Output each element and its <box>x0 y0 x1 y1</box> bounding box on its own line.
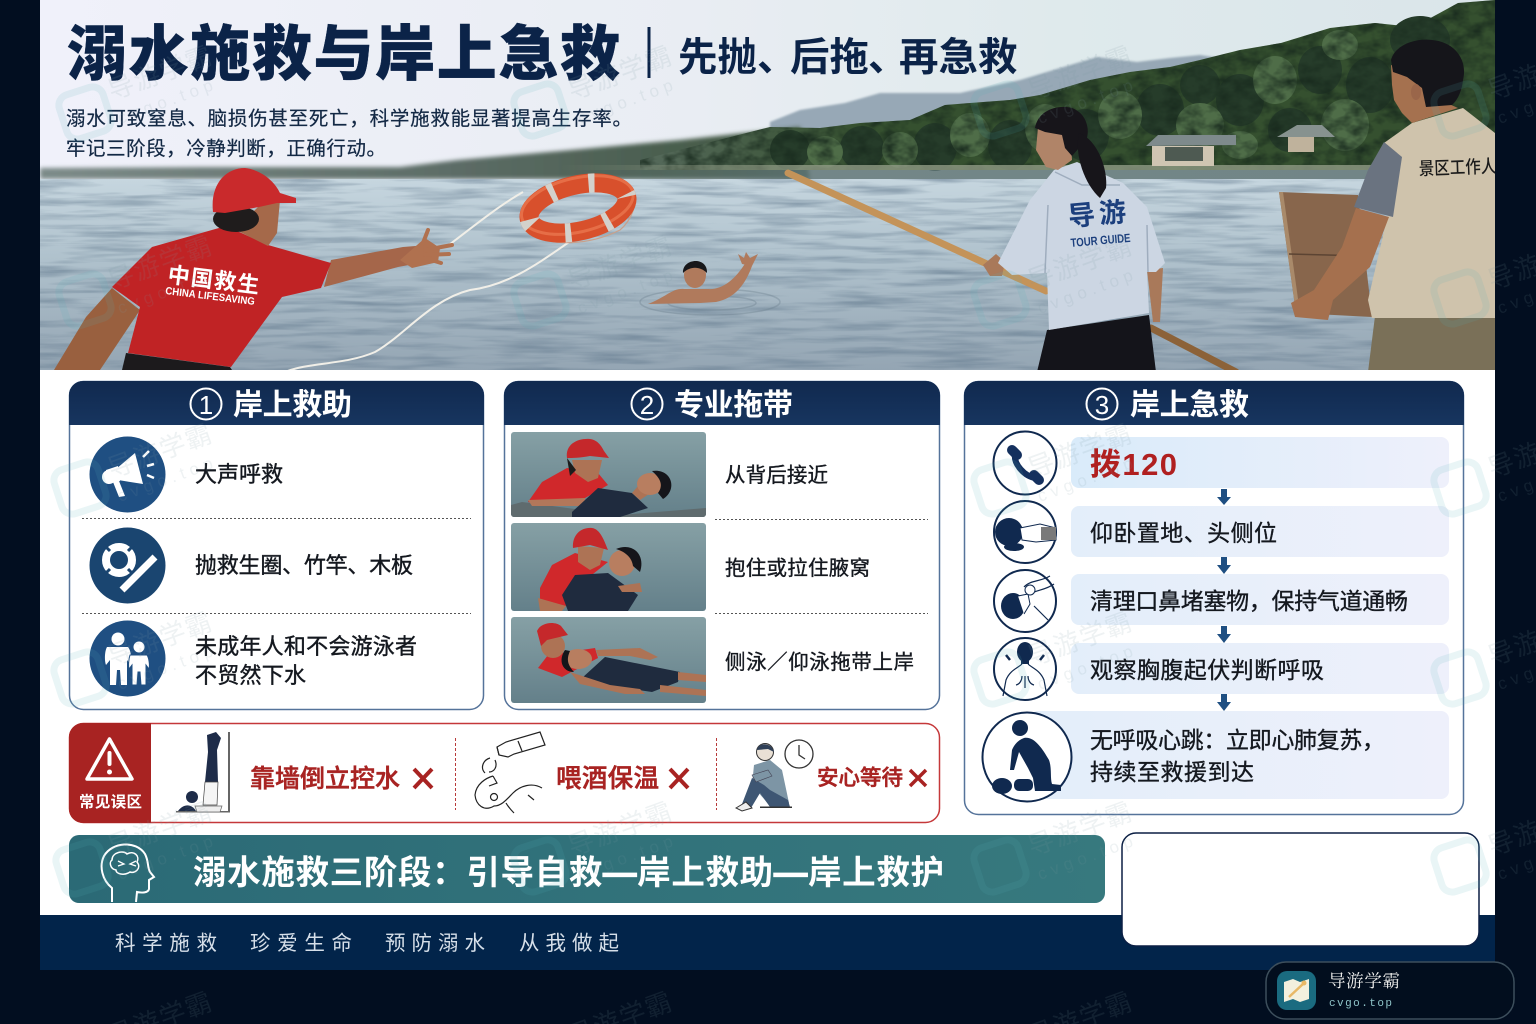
arrow <box>1217 489 1231 505</box>
lakeside pavilions <box>1146 125 1335 166</box>
watermarks: cvgo.top <box>575 832 675 884</box>
step 4 check breathing: 观察胸腹起伏判断呼吸 <box>1090 657 1324 683</box>
header title: 1 <box>199 390 213 420</box>
icon: pouring liquor <box>475 732 545 813</box>
header title: 专业拖带 <box>674 389 793 422</box>
brand url: cvgo.top <box>1329 998 1392 1010</box>
banner text: 溺水施救三阶段：引导自救—岸上救助—岸上救护 <box>193 845 944 894</box>
guide jacket print: TOUR GUIDE <box>1070 231 1131 250</box>
header title: 岸上急救 <box>1130 389 1249 422</box>
panel card <box>504 382 940 710</box>
panel header <box>504 381 940 425</box>
watermarks: cvgo.top <box>115 642 215 694</box>
step 2 lay on back <box>1071 506 1449 557</box>
watermarks: 导游学霸 <box>104 231 216 296</box>
panel: first aid on shore <box>964 381 1464 814</box>
row text: tow: 侧泳／仰泳拖带上岸 <box>725 651 914 674</box>
icon: lifebuoy and pole <box>90 528 166 604</box>
header title: 3 <box>1095 390 1109 420</box>
watermarks: cvgo.top <box>1035 266 1135 318</box>
tag text: 常见误区 <box>79 793 142 811</box>
subtitle: 、 <box>757 36 796 80</box>
icon: head tilted <box>994 501 1056 563</box>
wooded hills <box>640 0 1495 171</box>
watermarks: 导游学霸 <box>1024 607 1136 672</box>
watermarks: cvgo.top <box>1035 76 1135 128</box>
scenic staff man <box>1291 40 1512 372</box>
step 1 dial 120: 拨120 <box>1090 447 1177 482</box>
rope <box>285 192 635 372</box>
watermarks: 导游学霸 <box>564 41 676 106</box>
subtitle: 再急救 <box>899 36 1018 80</box>
watermarks: 导游学霸 <box>564 797 676 862</box>
step 2 lay on back: 仰卧置地、头侧位 <box>1090 520 1277 546</box>
arrow <box>1217 694 1231 711</box>
lifeguard shirt print: 中国救生 <box>166 262 261 298</box>
sky <box>40 0 1495 185</box>
panel card <box>70 382 484 710</box>
step 4 check breathing <box>1071 643 1449 694</box>
hero photo: lake rescue scene <box>40 0 1512 372</box>
watermarks: 导游学霸 <box>104 419 216 484</box>
watermarks: cvgo.top <box>115 76 215 128</box>
icon: phone <box>994 432 1056 494</box>
mistake text: handstand: 靠墙倒立控水 <box>250 765 400 793</box>
step 5 CPR: 无呼吸心跳：立即心肺复苏， <box>1090 721 1385 755</box>
header title: 2 <box>640 390 654 420</box>
footer slogans: 科学施救 <box>115 932 217 955</box>
footer slogans: 珍爱生命 <box>250 932 352 955</box>
watermarks: cvgo.top <box>1035 832 1135 884</box>
lifebuoy ring <box>520 173 636 243</box>
icon: warning triangle <box>87 739 132 779</box>
row text: shout: 大声呼救 <box>195 462 283 487</box>
icon: CPR <box>982 712 1072 802</box>
row text: no minors <box>195 634 417 688</box>
lake water <box>40 179 1495 370</box>
footer slogans: 从我做起 <box>519 932 619 955</box>
ripples around swimmer <box>640 289 780 315</box>
watermarks: cvgo.top <box>115 832 215 884</box>
lifeguard shirt print: CHINA LIFESAVING <box>165 285 255 308</box>
icon: sitting and waiting <box>736 740 813 811</box>
blank white box <box>1122 833 1479 946</box>
subtitle: 先抛 <box>678 36 757 80</box>
panel header <box>69 381 484 425</box>
arrow <box>1217 557 1231 574</box>
wooden board <box>1279 192 1372 317</box>
watermarks: 导游学霸 <box>1024 41 1136 106</box>
guide jacket print <box>1070 198 1130 247</box>
banner background <box>69 835 1105 903</box>
lifeguard in red <box>54 168 452 370</box>
row text: no minors: 未成年人和不会游泳者 <box>195 634 417 659</box>
mistakes tag <box>69 723 151 823</box>
step 5 CPR <box>1030 711 1449 799</box>
mistake text: liquor: 喂酒保温 <box>556 765 659 793</box>
header title: 岸上救助 <box>233 389 352 422</box>
banner: three stages <box>69 835 1105 903</box>
icon: megaphone <box>90 436 166 512</box>
step 5 CPR: 持续至救援到达 <box>1090 759 1254 785</box>
icon: chest rise <box>994 638 1056 700</box>
watermarks: 导游学霸 <box>1024 797 1136 862</box>
photo: hold armpit <box>511 523 706 611</box>
icon: map logo <box>1277 971 1316 1010</box>
watermarks: 导游学霸 <box>104 797 216 862</box>
watermarks: 导游学霸 <box>104 41 216 106</box>
step 1 dial 120 <box>1071 437 1449 488</box>
guide jacket print: 导游 <box>1067 197 1127 232</box>
icon: adult and child <box>90 620 166 696</box>
panel card <box>964 382 1464 814</box>
left distant shoreline <box>40 127 810 179</box>
photo: side stroke tow <box>511 617 706 703</box>
footer band <box>40 915 1495 970</box>
tour guide woman <box>983 107 1165 372</box>
panel: professional towing <box>504 381 940 710</box>
brand badge <box>1266 962 1514 1019</box>
title: 溺水施救与岸上急救 <box>67 21 620 88</box>
step 3 clear airway <box>1071 574 1449 625</box>
icon: head with brain <box>102 844 154 902</box>
intro text <box>66 108 632 160</box>
swimmer waving in water <box>648 252 758 304</box>
icon: handstand against wall <box>176 732 230 812</box>
staff vest print: 景区工作人员 <box>1418 156 1512 179</box>
watermarks: cvgo.top <box>575 266 675 318</box>
bamboo pole <box>788 173 1236 372</box>
footer slogans: 预防溺水 <box>385 932 485 955</box>
watermarks: cvgo.top <box>115 266 215 318</box>
step 3 clear airway: 清理口鼻堵塞物，保持气道通畅 <box>1090 588 1408 614</box>
mistake text: waiting: 安心等待 <box>817 766 903 790</box>
mistakes card <box>70 724 940 822</box>
watermarks: 导游学霸 <box>104 607 216 672</box>
watermarks: 导游学霸 <box>1024 419 1136 484</box>
panel: shore rescue <box>69 381 484 710</box>
arrow <box>1217 626 1231 643</box>
row text: approach: 从背后接近 <box>725 464 828 487</box>
intro text: 溺水可致窒息、脑损伤甚至死亡，科学施救能显著提高生存率。 <box>66 108 632 130</box>
watermarks: 导游学霸 <box>1024 231 1136 296</box>
row text: no minors: 不贸然下水 <box>195 663 306 688</box>
footer slogans <box>115 932 619 955</box>
brand name: 导游学霸 <box>1328 971 1400 991</box>
row text: throw: 抛救生圈、竹竿、木板 <box>195 553 413 578</box>
panel header <box>964 381 1464 425</box>
subtitle: 后拖 <box>790 36 869 80</box>
title divider <box>648 27 650 78</box>
subtitle: 、 <box>868 36 908 80</box>
distant mountains <box>768 54 1214 128</box>
watermarks: 导游学霸 <box>564 231 676 296</box>
intro text: 牢记三阶段，冷静判断，正确行动。 <box>66 138 386 160</box>
watermarks: cvgo.top <box>1035 454 1135 506</box>
shore strip <box>598 165 1371 179</box>
icon: clearing mouth <box>994 570 1056 632</box>
photo: approach from behind <box>511 432 706 517</box>
panel: common mistakes <box>69 723 940 823</box>
watermarks: cvgo.top <box>115 454 215 506</box>
row text: armpit: 抱住或拉住腋窝 <box>725 557 870 580</box>
watermarks: cvgo.top <box>1035 642 1135 694</box>
watermarks: cvgo.top <box>575 76 675 128</box>
